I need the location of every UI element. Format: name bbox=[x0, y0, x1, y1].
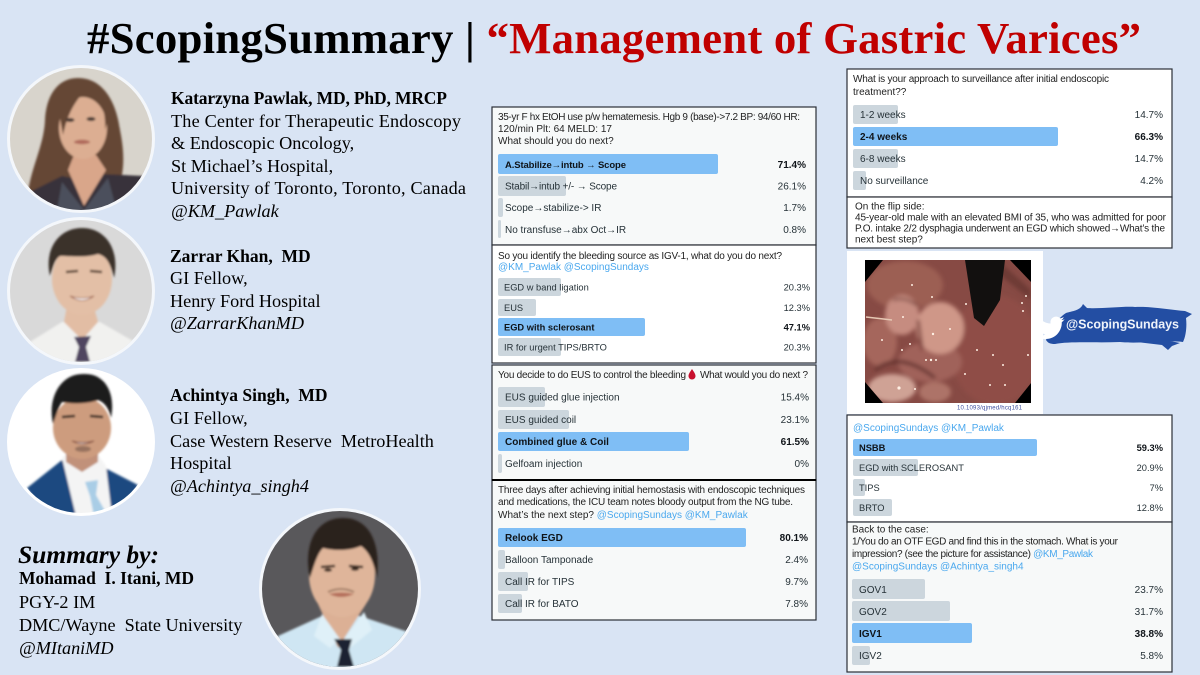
result bars: 61.5% bbox=[781, 437, 809, 448]
result bars: 2-4 weeks bbox=[860, 132, 908, 143]
portrait: Mohamad Itani bbox=[259, 507, 421, 675]
result bars: 71.4% bbox=[778, 160, 806, 171]
result bars: 7.8% bbox=[785, 599, 808, 610]
panel: poll 4 next step after hemostasis bbox=[492, 479, 816, 620]
question text bbox=[498, 485, 805, 521]
result bars: EGD with SCLEROSANT bbox=[859, 463, 964, 473]
result bars: 7% bbox=[1150, 483, 1163, 493]
panel: poll 3 EUS to control the bleeding bbox=[492, 365, 816, 480]
author: Mohamad Itani: Mohamad I. Itani, MD bbox=[19, 568, 194, 588]
result bars: 66.3% bbox=[1135, 132, 1163, 143]
result bars: 80.1% bbox=[780, 533, 808, 544]
result bars: 4.2% bbox=[1140, 176, 1163, 187]
result bars: EUS guided coil bbox=[505, 415, 576, 426]
portrait: Katarzyna Pawlak bbox=[7, 65, 155, 215]
panel: poll 5 surveillance bbox=[847, 69, 1172, 197]
result bars: 20.3% bbox=[784, 342, 810, 352]
result bars: No transfuse→abx Oct→IR bbox=[505, 225, 626, 236]
question text: What would you do next ? bbox=[700, 370, 808, 381]
question text bbox=[853, 74, 1109, 98]
author: Achintya Singh: Case Western Reserve MetroHealth bbox=[170, 431, 434, 451]
result bars: EGD w band ligation bbox=[504, 282, 589, 292]
result bars: 0.8% bbox=[783, 225, 806, 236]
icon: blood drop bbox=[688, 369, 696, 380]
author: Achintya Singh: GI Fellow, bbox=[170, 408, 248, 428]
question text: Three days after achieving initial hemostasis with endoscopic techniques bbox=[498, 485, 805, 496]
author: Achintya Singh: @Achintya_singh4 bbox=[170, 476, 309, 496]
result bars bbox=[498, 154, 806, 238]
result bars: BRTO bbox=[859, 503, 884, 513]
panel: poll 7 treatment options bbox=[847, 415, 1172, 522]
question text: impression? (see the picture for assistance) @KM_Pawlak bbox=[852, 549, 1094, 560]
result bars: 9.7% bbox=[785, 577, 808, 588]
result bars: Combined glue & Coil bbox=[505, 437, 609, 448]
author: Zarrar Khan: Zarrar Khan, MD bbox=[170, 246, 311, 266]
question text bbox=[852, 524, 1119, 572]
question text: So you identify the bleeding source as IGV-1, what do you do next? bbox=[498, 251, 782, 262]
panel: flip side case text: P.O. intake 2/2 dysphagia underwent an EGD which showed→What’s the bbox=[855, 224, 1165, 234]
question text bbox=[498, 112, 800, 147]
result bars: GOV1 bbox=[859, 585, 887, 596]
result bars: GOV2 bbox=[859, 607, 887, 618]
author: Zarrar Khan: @ZarrarKhanMD bbox=[170, 313, 304, 333]
panel: flip side case text: On the flip side: bbox=[855, 202, 924, 212]
result bars: 1-2 weeks bbox=[860, 110, 906, 121]
result bars: 14.7% bbox=[1135, 154, 1163, 165]
result bars bbox=[498, 528, 808, 613]
image caption: 10.1093/qjmed/hcq161 bbox=[957, 406, 1023, 412]
result bars bbox=[853, 105, 1163, 190]
result bars: 15.4% bbox=[781, 392, 809, 404]
result bars: 31.7% bbox=[1135, 607, 1163, 618]
result bars: 14.7% bbox=[1135, 110, 1163, 121]
icon: twitter bird bbox=[1037, 317, 1065, 339]
result bars: Scope→stabilize-> IR bbox=[505, 203, 601, 214]
question text bbox=[498, 251, 782, 273]
author: Katarzyna Pawlak: University of Toronto, Toronto, Canada bbox=[171, 178, 466, 198]
question text: 120/min Plt: 64 MELD: 17 bbox=[498, 124, 612, 135]
result bars: Call IR for BATO bbox=[505, 599, 579, 610]
author: Achintya Singh: Hospital bbox=[170, 453, 232, 473]
question text: @ScopingSundays @Achintya_singh4 bbox=[852, 562, 1024, 572]
result bars: 23.7% bbox=[1135, 585, 1163, 596]
panel: flip side case text: 45-year-old male with an elevated BMI of 35, who was admitted for poor bbox=[855, 212, 1167, 224]
question text: @KM_Pawlak @ScopingSundays bbox=[498, 262, 649, 273]
title: #ScopingSummary | “Management of Gastric Varices” bbox=[87, 13, 1141, 63]
author: Mohamad Itani: @MItaniMD bbox=[19, 638, 114, 658]
question text: What’s the next step? @ScopingSundays @KM_Pawlak bbox=[498, 510, 749, 521]
heading: summary by: Summary by: bbox=[18, 540, 159, 569]
result bars: NSBB bbox=[859, 443, 886, 453]
result bars: Gelfoam injection bbox=[505, 459, 582, 470]
panel: poll 8 impression bbox=[847, 522, 1172, 672]
author: Katarzyna Pawlak bbox=[171, 88, 466, 221]
result bars: Balloon Tamponade bbox=[505, 555, 594, 566]
result bars: 23.1% bbox=[781, 415, 809, 426]
author: Zarrar Khan: Henry Ford Hospital bbox=[170, 291, 321, 311]
author: Mohamad Itani: DMC/Wayne State University bbox=[19, 615, 243, 635]
question text bbox=[498, 370, 808, 381]
result bars: IGV1 bbox=[859, 629, 882, 640]
result bars: 2.4% bbox=[785, 555, 808, 566]
question text: What should you do next? bbox=[498, 136, 614, 147]
panel: poll 1 what should you do next bbox=[492, 107, 816, 245]
result bars: 26.1% bbox=[778, 182, 806, 192]
result bars: 12.3% bbox=[784, 303, 810, 313]
question text: 1/You do an OTF EGD and find this in the stomach. What is your bbox=[852, 536, 1119, 548]
panel: endoscopic image bbox=[847, 251, 1043, 414]
author: Katarzyna Pawlak: @KM_Pawlak bbox=[171, 201, 280, 221]
result bars: 38.8% bbox=[1135, 629, 1163, 640]
portrait: Zarrar Khan bbox=[7, 217, 155, 365]
question text: What is your approach to surveillance after initial endoscopic bbox=[853, 74, 1109, 85]
panel: poll 2 bleeding source IGV-1 bbox=[492, 245, 816, 363]
result bars: 47.1% bbox=[784, 322, 811, 332]
result bars bbox=[498, 387, 809, 473]
result bars: 5.8% bbox=[1140, 651, 1163, 662]
question text: You decide to do EUS to control the bleeding bbox=[498, 370, 686, 381]
author: Zarrar Khan: GI Fellow, bbox=[170, 268, 248, 288]
result bars: 6-8 weeks bbox=[860, 154, 906, 165]
result bars bbox=[498, 278, 811, 356]
author: Mohamad Itani: PGY-2 IM bbox=[19, 592, 95, 612]
author: Katarzyna Pawlak: The Center for Therapeutic Endoscopy bbox=[171, 111, 462, 131]
handles: @ScopingSundays @KM_Pawlak bbox=[853, 423, 1005, 434]
result bars: Relook EGD bbox=[505, 533, 563, 544]
result bars: 1.7% bbox=[783, 203, 806, 214]
logo handle: @ScopingSundays bbox=[1066, 318, 1179, 332]
author: Zarrar Khan bbox=[170, 246, 321, 333]
question text: 35-yr F hx EtOH use p/w hematemesis. Hgb 9 (base)->7.2 BP: 94/60 HR: bbox=[498, 112, 800, 123]
result bars: EGD with sclerosant bbox=[504, 322, 594, 332]
author: Mohamad Itani bbox=[19, 568, 243, 658]
author: Katarzyna Pawlak: St Michael’s Hospital, bbox=[171, 156, 333, 176]
result bars: 20.9% bbox=[1137, 463, 1163, 473]
question text: treatment?? bbox=[853, 87, 907, 98]
author: Katarzyna Pawlak: Katarzyna Pawlak, MD, PhD, MRCP bbox=[171, 88, 447, 108]
portrait: Achintya Singh bbox=[7, 368, 155, 516]
question text: and medications, the ICU team notes bloody output from the NG tube. bbox=[498, 497, 793, 508]
result bars: IR for urgent TIPS/BRTO bbox=[504, 342, 607, 352]
result bars: 12.8% bbox=[1137, 503, 1163, 513]
panel: flip side case text: next best step? bbox=[855, 234, 923, 246]
author: Katarzyna Pawlak: & Endoscopic Oncology, bbox=[171, 133, 354, 153]
result bars: 0% bbox=[795, 459, 809, 470]
question text: Back to the case: bbox=[852, 524, 929, 536]
result bars: 59.3% bbox=[1137, 443, 1164, 453]
result bars: EUS guided glue injection bbox=[505, 392, 620, 404]
author: Achintya Singh: Achintya Singh, MD bbox=[170, 385, 328, 405]
result bars: TIPS bbox=[859, 483, 880, 493]
panel: flip side case text bbox=[847, 197, 1172, 248]
result bars bbox=[852, 579, 1163, 665]
result bars: Call IR for TIPS bbox=[505, 577, 575, 588]
result bars: Stabil→intub +/- → Scope bbox=[505, 182, 617, 192]
result bars: 20.3% bbox=[784, 282, 810, 292]
result bars: No surveillance bbox=[860, 176, 929, 187]
result bars: IGV2 bbox=[859, 651, 882, 662]
result bars bbox=[853, 439, 1164, 516]
result bars: A.Stabilize→intub → Scope bbox=[505, 160, 626, 171]
logo: ScopingSundays twitter banner bbox=[1037, 304, 1192, 350]
result bars: EUS bbox=[504, 303, 523, 313]
author: Achintya Singh bbox=[170, 385, 434, 496]
